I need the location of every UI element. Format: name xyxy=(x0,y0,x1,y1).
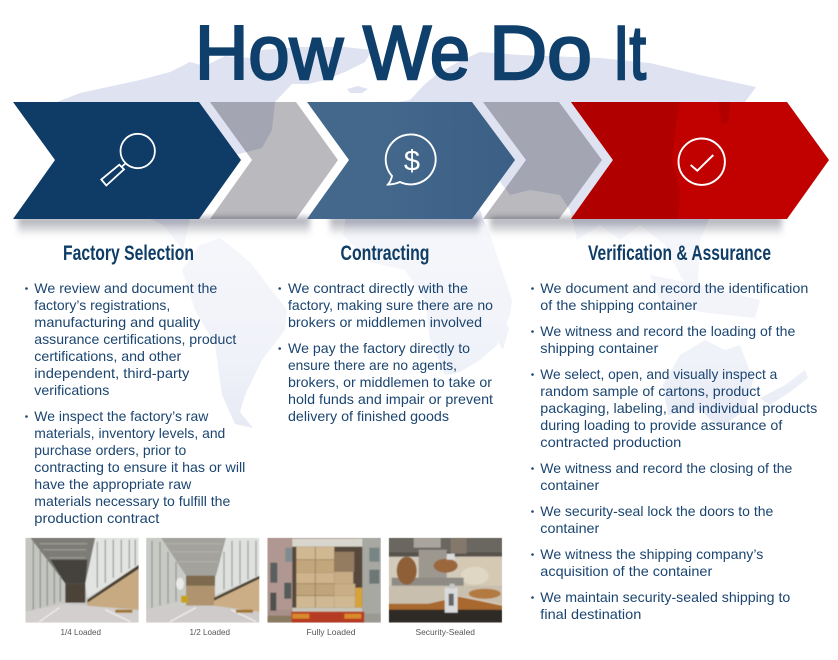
chevron: factory selection xyxy=(13,102,241,219)
chevron: contracting xyxy=(307,102,515,219)
bullet: raw materials inspection: We inspect the factory’s raw xyxy=(34,408,209,424)
bullet: loading record: shipping container xyxy=(540,340,659,356)
bullet: raw materials inspection: contracting to ensure it has or will xyxy=(34,459,245,475)
bullet: factory documents: verifications xyxy=(34,382,109,398)
bullet: security seal: We security-seal lock the doors to the xyxy=(540,503,774,519)
bullet: container identification: of the shipping container xyxy=(540,297,698,313)
bullet: factory documents: assurance certifications, product xyxy=(34,331,236,347)
caption: half loaded: 1/2 Loaded xyxy=(190,627,230,637)
bullet: raw materials inspection xyxy=(25,408,245,526)
caption: security sealed: Security-Sealed xyxy=(416,627,475,637)
bullet: factory documents: factory’s registrations, xyxy=(34,297,170,313)
bullet: sample inspection xyxy=(531,366,817,450)
bullet: sample inspection: during loading to provide assurance of xyxy=(540,417,782,433)
photo: quarter loaded container xyxy=(25,538,139,623)
bullet: direct payment: ensure there are no agents, xyxy=(288,357,457,373)
text block: verification bullets xyxy=(531,280,817,622)
bullet: factory documents: certifications, and other xyxy=(34,348,182,364)
caption: fully loaded: Fully Loaded xyxy=(306,627,356,637)
title: It xyxy=(613,11,646,96)
bullet: raw materials inspection: production contract xyxy=(34,510,159,526)
title: We xyxy=(363,11,470,96)
chevron shadows xyxy=(18,217,782,236)
bullet: closing record xyxy=(531,460,793,493)
chevron: connector two xyxy=(483,102,602,219)
icon: magnifying glass xyxy=(101,134,155,186)
bullet: direct payment: delivery of finished goods xyxy=(288,408,449,424)
bullet: direct contract: factory, making sure there are no xyxy=(288,297,493,313)
heading: verification and assurance: Verification & Assurance xyxy=(588,242,771,265)
text block: contracting bullets xyxy=(278,280,493,424)
photo: fully loaded container xyxy=(267,538,381,623)
bullet: raw materials inspection: materials necessary to fulfill the xyxy=(34,493,231,509)
heading: factory selection: Factory Selection xyxy=(63,242,194,265)
photo: half loaded container xyxy=(146,538,260,623)
chevron: verification xyxy=(571,102,829,219)
world map background xyxy=(57,47,808,428)
bullet: sealed shipping: We maintain security-sealed shipping to xyxy=(540,589,791,605)
caption: quarter loaded: 1/4 Loaded xyxy=(60,627,101,637)
bullet: sample inspection: We select, open, and visually inspect a xyxy=(540,366,777,382)
title: Do xyxy=(489,11,592,96)
bullet: factory documents xyxy=(25,280,236,398)
bullet: raw materials inspection: materials, inventory levels, and xyxy=(34,425,225,441)
title xyxy=(195,11,646,96)
bullet: closing record: container xyxy=(540,477,600,493)
icon: check mark circle xyxy=(678,138,725,185)
bullet: direct payment: brokers, or middlemen to take or xyxy=(288,374,492,390)
bullet: sealed shipping: final destination xyxy=(540,606,641,622)
heading: contracting: Contracting xyxy=(340,242,430,265)
bullet: direct payment: We pay the factory directly to xyxy=(288,340,470,356)
chevron: connector one xyxy=(210,102,338,219)
process chevrons xyxy=(13,102,829,219)
bullet: container identification: We document and record the identification xyxy=(540,280,808,296)
photo: security sealed door xyxy=(389,538,502,623)
bullet: acquisition: acquisition of the container xyxy=(540,563,713,579)
bullet: direct contract: brokers or middlemen involved xyxy=(288,314,482,330)
bullet: factory documents: We review and document the xyxy=(34,280,218,296)
bullet: sample inspection: packaging, labeling, and individual products xyxy=(540,400,817,416)
icon: dollar speech bubble xyxy=(386,134,436,184)
bullet: sample inspection: contracted production xyxy=(540,434,681,450)
bullet: acquisition: We witness the shipping company’s xyxy=(540,546,763,562)
bullet: loading record xyxy=(531,323,796,356)
bullet: closing record: We witness and record the closing of the xyxy=(540,460,793,476)
icon: dollar speech bubble: $ xyxy=(404,146,420,178)
bullet: security seal: container xyxy=(540,520,600,536)
text block: factory selection bullets xyxy=(25,280,245,526)
bullet: sample inspection: random sample of cartons, product xyxy=(540,383,760,399)
bullet: acquisition xyxy=(531,546,763,579)
bullet: raw materials inspection: have the appropriate raw xyxy=(34,476,192,492)
bullet: factory documents: manufacturing and quality xyxy=(34,314,200,330)
bullet: direct contract: We contract directly with the xyxy=(288,280,468,296)
bullet: factory documents: independent, third-party xyxy=(34,365,189,381)
title: How xyxy=(195,11,344,96)
bullet: loading record: We witness and record the loading of the xyxy=(540,323,796,339)
bullet: security seal xyxy=(531,503,774,536)
bullet: container identification xyxy=(531,280,808,313)
bullet: direct payment: hold funds and impair or prevent xyxy=(288,391,493,407)
bullet: sealed shipping xyxy=(531,589,791,622)
bullet: raw materials inspection: purchase orders, prior to xyxy=(34,442,186,458)
bullet: direct contract xyxy=(278,280,493,330)
bullet: direct payment xyxy=(278,340,493,424)
